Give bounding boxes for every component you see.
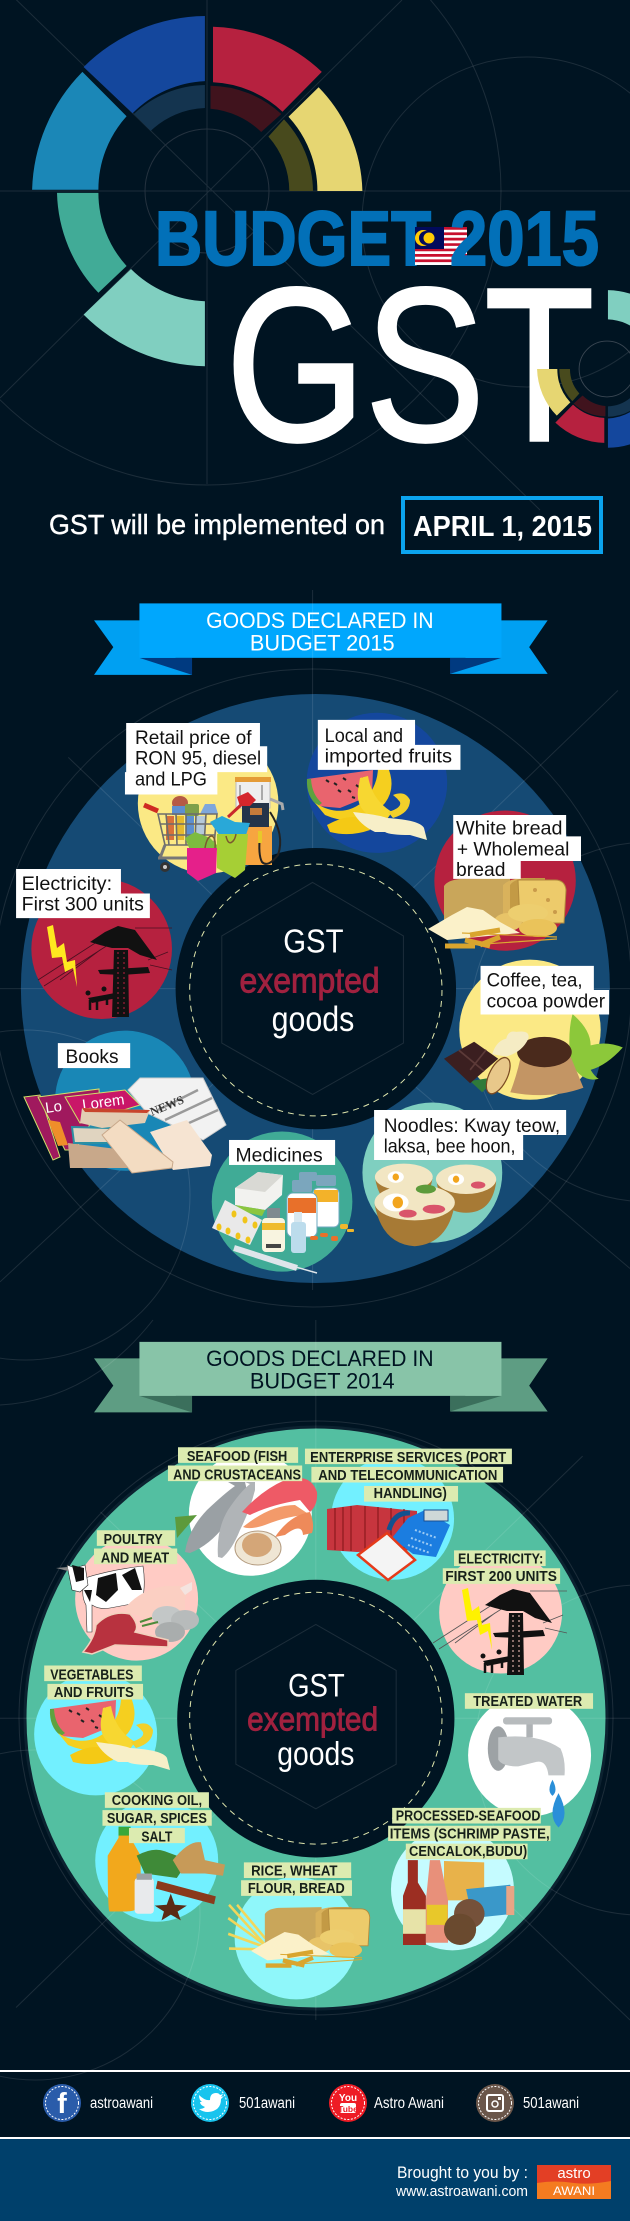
wheel line art 2015	[0, 590, 630, 1360]
item: bread	[428, 811, 576, 951]
label: fruits	[318, 720, 460, 770]
item: processed seafood	[391, 1828, 514, 1950]
wheel hub 2015: goods	[272, 1001, 354, 1039]
item: electricity	[31, 879, 172, 1019]
footer credit band: Brought to you by :	[397, 2163, 528, 2182]
label: coffee: cocoa powder	[487, 990, 605, 1012]
item: cooking oil, sugar, spices, salt	[95, 1799, 225, 1922]
wheel hub 2014	[177, 1580, 454, 1857]
label: cooking: COOKING OIL,	[112, 1793, 202, 1809]
label: books: Books	[65, 1045, 119, 1067]
banner: goods declared in budget 2015: BUDGET 2015	[250, 631, 395, 656]
label: seafood	[168, 1447, 302, 1484]
footer credit band: www.astroawani.com	[395, 2183, 528, 2200]
banner: goods declared in budget 2015: GOODS DECLARED IN	[206, 609, 434, 633]
wheel hub 2014: GST	[288, 1668, 345, 1704]
wheel hub 2014: goods	[277, 1736, 354, 1772]
label: bread: White bread	[456, 817, 563, 839]
label: bread	[453, 815, 581, 880]
label: electricity: Electricity:	[22, 872, 112, 894]
label: electricity	[16, 869, 150, 918]
label: electricity 200: ELECTRICITY:	[458, 1551, 543, 1567]
label: retail	[125, 723, 267, 794]
label: seafood: AND CRUSTACEANS	[173, 1467, 301, 1484]
banner: goods declared in budget 2014: GOODS DECLARED IN	[206, 1347, 434, 1371]
panel: budget 2014 wheel	[25, 1427, 607, 2009]
item: rice, wheat, bread	[228, 1877, 370, 1999]
label: rice: RICE, WHEAT	[251, 1863, 338, 1880]
icon: youtube	[329, 2084, 367, 2122]
label: noodles: laksa, bee hoon,	[384, 1135, 516, 1157]
label: noodles: Noodles: Kway teow,	[384, 1114, 560, 1136]
item: books: NEWS	[148, 1092, 186, 1119]
item: books: Lo	[44, 1098, 63, 1117]
item: vegetables and fruits	[34, 1673, 170, 1795]
title: budget 2015: BUDGET	[155, 196, 431, 282]
label: noodles	[374, 1110, 566, 1160]
footer social bar: astroawani	[90, 2095, 153, 2112]
date callout	[403, 498, 601, 552]
label: cooking: SALT	[141, 1829, 173, 1846]
wheel hub 2015	[176, 848, 456, 1129]
icon: facebook	[43, 2084, 81, 2122]
banner: goods declared in budget 2014: BUDGET 2014	[250, 1369, 395, 1394]
icon: youtube: You	[339, 2093, 357, 2104]
label: coffee	[481, 966, 609, 1015]
label: poultry	[94, 1530, 177, 1567]
label: electricity: First 300 units	[22, 893, 144, 915]
label: vegetables: AND FRUITS	[54, 1685, 134, 1701]
label: poultry: AND MEAT	[101, 1550, 169, 1567]
label: retail: Retail price of	[135, 726, 252, 748]
banner: goods declared in budget 2015	[94, 603, 548, 675]
icon: facebook: f	[57, 2088, 67, 2120]
header background line art	[0, 0, 630, 510]
icon: youtube: Tube	[338, 2104, 358, 2114]
wheel hub 2014: exempted	[247, 1701, 378, 1738]
label: rice: FLOUR, BREAD	[248, 1881, 345, 1897]
item: seafood	[175, 1453, 317, 1576]
label: enterprise services: AND TELECOMMUNICATION	[318, 1468, 497, 1484]
label: cooking: SUGAR, SPICES	[107, 1810, 207, 1827]
label: enterprise services: ENTERPRISE SERVICES (PORT	[310, 1449, 506, 1466]
label: enterprise services: HANDLING)	[374, 1486, 447, 1502]
item: fruits	[307, 713, 447, 853]
label: poultry: POULTRY	[104, 1531, 163, 1548]
implementation date text: GST will be implemented on	[49, 509, 385, 540]
logo: astro awani	[537, 2165, 611, 2199]
item: medicines	[212, 1131, 354, 1273]
item: books	[24, 1031, 226, 1173]
header donut chart	[32, 16, 362, 366]
icon: twitter	[191, 2084, 229, 2122]
label: processed: PROCESSED-SEAFOOD	[396, 1808, 540, 1825]
footer social bar: 501awani	[239, 2095, 295, 2112]
label: processed: CENCALOK,BUDU)	[409, 1844, 527, 1860]
item: poultry and meat	[56, 1537, 199, 1661]
label: fruits: imported fruits	[325, 744, 452, 767]
footer social bar: Astro Awani	[374, 2095, 444, 2112]
item: coffee	[444, 960, 623, 1100]
label: medicines: Medicines	[235, 1144, 323, 1166]
item: noodles	[362, 1102, 502, 1246]
footer social bar	[0, 2070, 630, 2139]
label: bread: + Wholemeal	[457, 838, 569, 860]
icon: instagram	[476, 2084, 514, 2122]
label: electricity 200	[443, 1550, 560, 1585]
item: retail fuel	[138, 733, 283, 881]
label: processed: ITEMS (SCHRIMP PASTE,	[390, 1826, 550, 1842]
logo: astro awani: AWANI	[553, 2184, 595, 2198]
label: vegetables: VEGETABLES	[50, 1667, 134, 1684]
date callout: APRIL 1, 2015	[413, 511, 592, 543]
wheel line art 2014	[0, 1320, 630, 2080]
label: seafood: SEAFOOD (FISH	[187, 1448, 287, 1465]
label: bread: bread	[456, 858, 505, 880]
mini donut chart	[537, 290, 630, 448]
label: books	[58, 1043, 130, 1068]
logo: astro awani: astro	[557, 2165, 591, 2182]
label: enterprise services	[305, 1449, 512, 1502]
item: treated water	[468, 1694, 591, 1828]
label: coffee: Coffee, tea,	[487, 969, 583, 991]
label: cooking	[102, 1792, 212, 1846]
icon: Malaysian flag	[415, 227, 467, 265]
label: retail: RON 95, diesel	[135, 747, 261, 769]
label: processed	[388, 1808, 550, 1860]
footer social bar: 501awani	[523, 2095, 579, 2112]
label: retail: and LPG	[135, 768, 207, 790]
label: electricity 200: FIRST 200 UNITS	[445, 1569, 557, 1585]
items wheel 2015	[16, 713, 623, 1273]
label: treated water: TREATED WATER	[473, 1694, 583, 1710]
footer credit band	[0, 2139, 630, 2221]
label: rice	[241, 1862, 352, 1897]
item: books: Lorem	[81, 1091, 126, 1114]
banner: goods declared in budget 2014	[94, 1342, 548, 1412]
wheel hub 2015: exempted	[239, 962, 380, 1001]
wheel hub 2015: GST	[283, 923, 344, 960]
item: enterprise services	[327, 1457, 454, 1580]
label: medicines	[229, 1140, 335, 1166]
title: budget 2015: 2015	[450, 196, 599, 282]
items wheel 2014	[34, 1447, 593, 1999]
label: vegetables	[44, 1666, 143, 1701]
item: electricity	[433, 1551, 567, 1675]
label: fruits: Local and	[325, 724, 403, 746]
panel: budget 2015 wheel	[21, 694, 610, 1283]
